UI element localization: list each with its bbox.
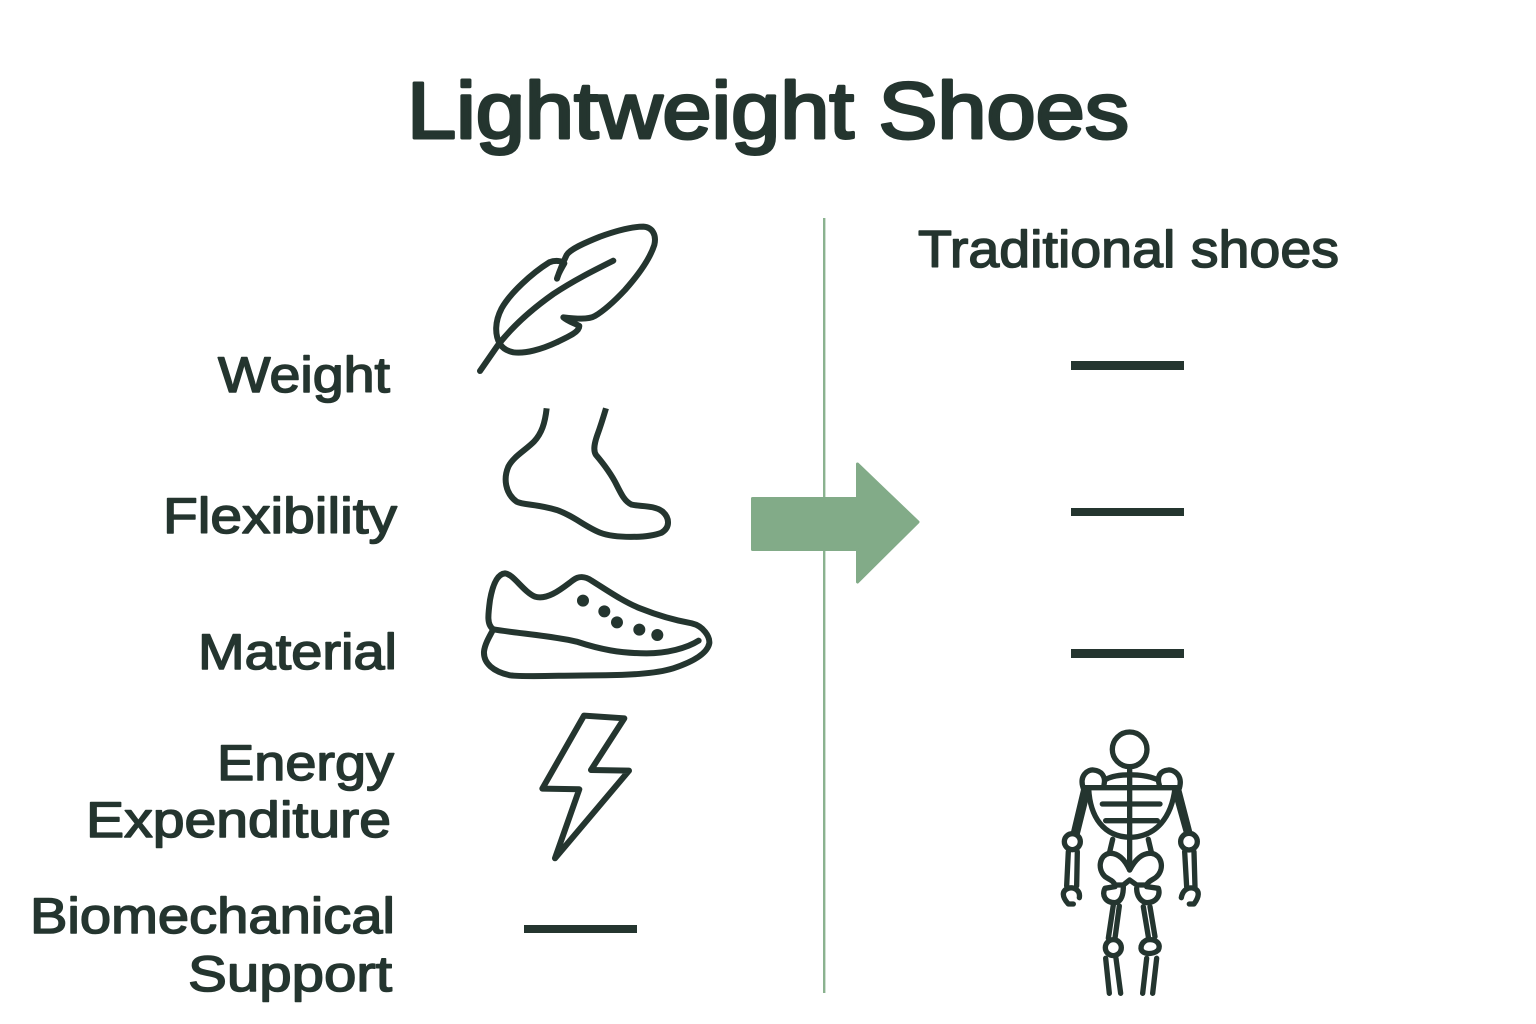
icon: feather xyxy=(480,227,655,371)
label: energy expenditure: Expenditure xyxy=(86,792,391,848)
icon: skeleton xyxy=(1063,732,1198,993)
label: weight: Weight xyxy=(218,347,390,403)
column heading: traditional shoes: Traditional shoes xyxy=(918,221,1339,279)
label: energy expenditure: Energy xyxy=(217,735,394,791)
dash: weight xyxy=(1071,361,1184,370)
icon: lightning bolt xyxy=(542,716,629,858)
label: biomechanical support xyxy=(30,888,395,1002)
dash: flexibility xyxy=(1071,508,1184,516)
label: flexibility: Flexibility xyxy=(163,488,397,544)
dash: material xyxy=(1071,649,1184,658)
divider line xyxy=(823,218,825,993)
label: energy expenditure xyxy=(86,735,394,848)
label: material: Material xyxy=(198,624,397,680)
arrow xyxy=(752,464,918,582)
icon: running shoe xyxy=(484,573,709,676)
label: biomechanical support: Biomechanical xyxy=(30,888,395,944)
icon: foot xyxy=(506,408,668,537)
label: biomechanical support: Support xyxy=(188,946,392,1002)
title: Lightweight Shoes xyxy=(407,66,1129,155)
dash: biomechanical support xyxy=(524,925,637,933)
